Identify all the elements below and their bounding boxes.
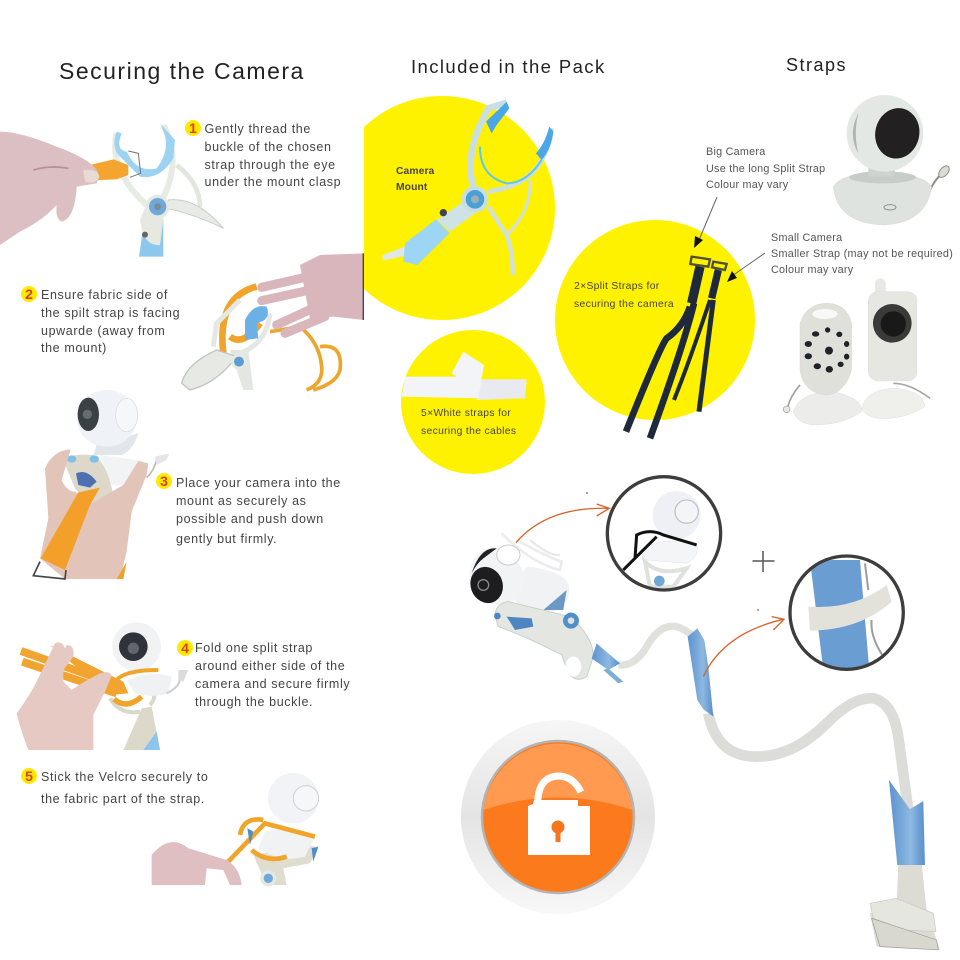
callout: small camera: Small Camera [771, 232, 842, 244]
yellow circle: split straps [555, 220, 755, 438]
callout: big camera [694, 146, 825, 248]
yellow circle: camera mount [364, 96, 555, 320]
upper gooseneck [618, 626, 693, 665]
step 5 badge: 5 [25, 768, 33, 784]
step 4 photo: folding strap around camera [17, 622, 188, 750]
step 3 instructions: gently but firmly. [176, 532, 277, 546]
callout: big camera: Big Camera [706, 146, 766, 158]
small camera photo: monitor and handset [783, 278, 930, 425]
heading: included in the pack: Included in the Pack [411, 56, 606, 77]
step 1 badge: 1 [189, 120, 197, 136]
open padlock [528, 776, 590, 855]
callout: small camera: Smaller Strap (may not be required) [771, 248, 953, 260]
step 4 badge: 4 [181, 640, 189, 656]
step 2 instructions: upwarde (away from [41, 324, 165, 338]
step 4 instructions: camera and secure firmly [195, 677, 350, 691]
step 1 badge [185, 120, 201, 136]
yellow circle: camera mount: Camera [396, 166, 435, 177]
step 3 photo: camera placed into mount [33, 390, 169, 579]
callout: small camera [727, 232, 953, 282]
step 2 photo: hand holding strap and mount [182, 253, 364, 390]
plus sign [752, 551, 774, 572]
callout: small camera: Colour may vary [771, 264, 854, 276]
step 3 badge [156, 473, 172, 489]
step 2 instructions: Ensure fabric side of [41, 288, 168, 302]
heading: securing the camera: Securing the Camera [59, 58, 305, 84]
big camera photo [833, 95, 951, 225]
white strap illustration [402, 352, 527, 400]
step 1 instructions: under the mount clasp [204, 175, 341, 189]
callout: big camera: Use the long Split Strap [706, 163, 825, 175]
step 2 badge [21, 286, 37, 302]
camera mount illustration [383, 102, 553, 275]
blue joint sleeve [688, 628, 713, 717]
step 5 instructions: the fabric part of the strap. [41, 792, 205, 806]
dark split straps [626, 257, 727, 438]
detail circle: velcro on blue sleeve [790, 556, 903, 670]
step 4 instructions: through the buckle. [195, 695, 313, 709]
step 4 instructions: around either side of the [195, 659, 345, 673]
step 1 instructions: strap through the eye [204, 158, 336, 172]
step 1 instructions [185, 120, 341, 189]
step 3 instructions: Place your camera into the [176, 476, 341, 490]
step 2 instructions: the spilt strap is facing [41, 306, 180, 320]
step 4 badge [177, 640, 193, 656]
camera and mount on arm [459, 533, 623, 683]
step 3 badge: 3 [160, 473, 168, 489]
arrow to long strap [694, 197, 717, 248]
step 4 instructions: Fold one split strap [195, 641, 313, 655]
step 3 instructions: mount as securely as [176, 494, 307, 508]
step 5 instructions [21, 768, 208, 806]
lower gooseneck [708, 698, 908, 810]
step 5 badge [21, 768, 37, 784]
step 2 badge: 2 [25, 286, 33, 302]
step 5 photo: securing velcro strap [152, 773, 319, 886]
arrow to short strap [727, 253, 765, 282]
orange arrow to velcro detail [703, 617, 784, 677]
yellow circle: split straps: securing the camera [574, 299, 674, 310]
yellow circle: white straps: 5×White straps for [421, 408, 511, 419]
detail circle: camera strap [607, 477, 721, 590]
heading: straps: Straps [786, 55, 847, 75]
orange arrow to strap detail [516, 504, 609, 543]
step 1 instructions: Gently thread the [204, 122, 311, 136]
step 2 instructions [21, 286, 180, 355]
icon: orange unlock button [461, 720, 655, 914]
step 1 photo: hand threading strap through mount [0, 123, 223, 257]
yellow circle: white straps [401, 330, 545, 474]
callout: big camera: Colour may vary [706, 179, 789, 191]
base sleeve and clamp [870, 780, 940, 950]
step 1 instructions: buckle of the chosen [204, 140, 332, 154]
yellow circle: split straps: 2×Split Straps for [574, 281, 660, 292]
product photo: gooseneck arm and clamp [459, 504, 940, 950]
step 4 instructions [177, 640, 350, 709]
small dots [586, 492, 759, 611]
yellow circle: camera mount: Mount [396, 182, 428, 193]
step 3 instructions: possible and push down [176, 512, 324, 526]
step 3 instructions [156, 473, 341, 546]
step 5 instructions: Stick the Velcro securely to [41, 770, 208, 784]
step 2 instructions: the mount) [41, 341, 107, 355]
yellow circle: white straps: securing the cables [421, 426, 516, 437]
